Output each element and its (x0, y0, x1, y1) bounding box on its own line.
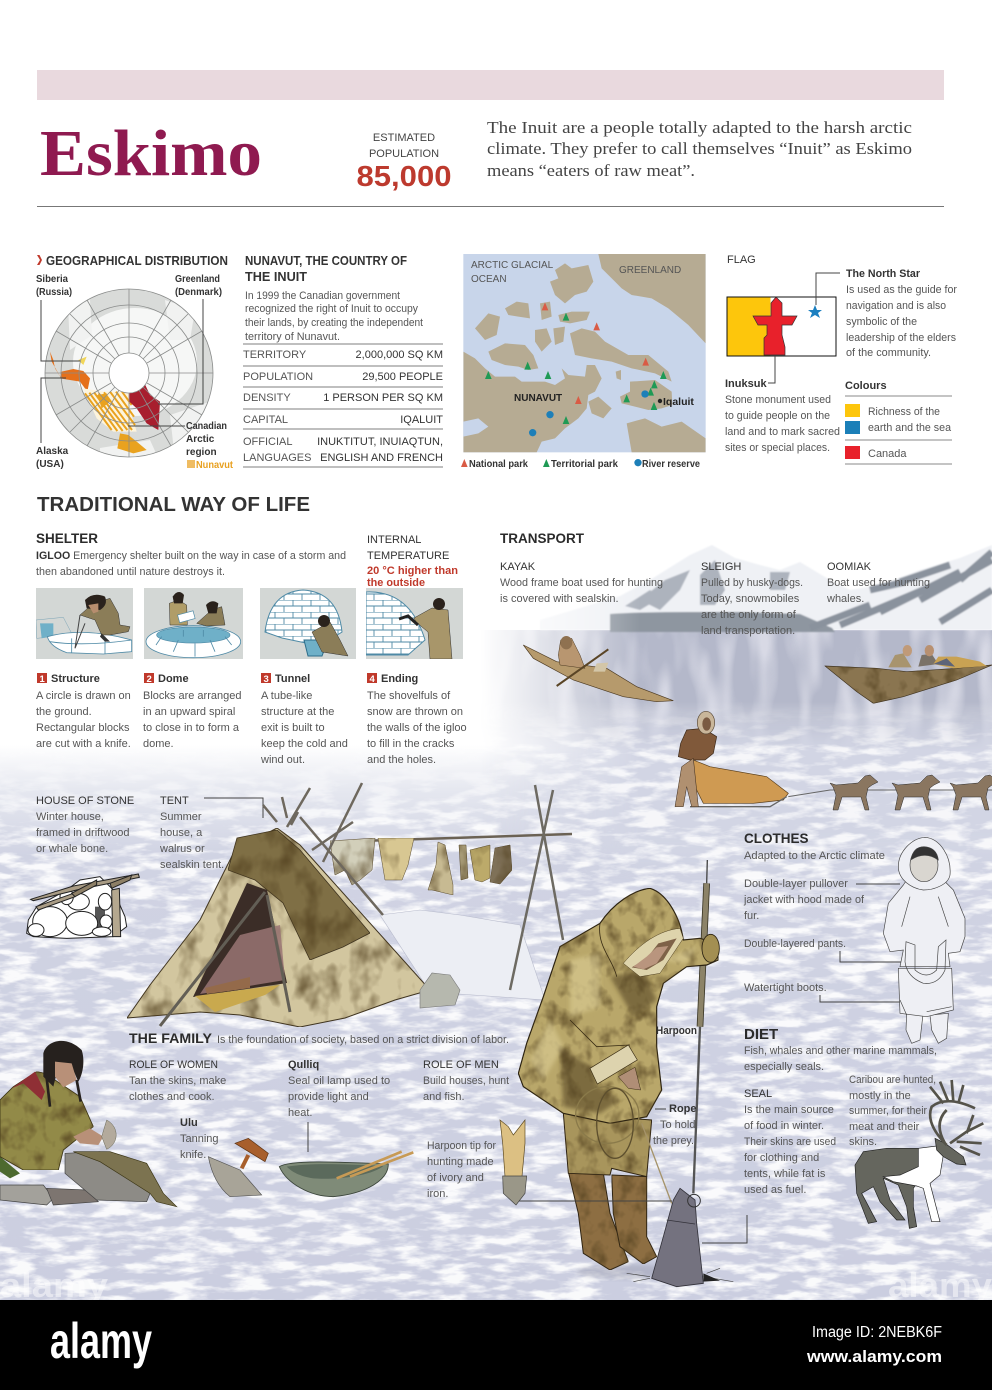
parka highlights (530, 947, 697, 1080)
igloo step 1 illustration (36, 588, 133, 659)
sleigh and driver (675, 711, 992, 807)
tent body (127, 828, 430, 1027)
parka (518, 888, 718, 1123)
harpoon and rope labels: Rope (669, 1103, 696, 1115)
estimated population: ESTIMATED (373, 132, 435, 144)
map legend: River reserve (642, 459, 700, 470)
seal (627, 1188, 733, 1287)
kayak (523, 636, 673, 702)
diet text: of food in winter. (744, 1120, 824, 1132)
harpoon and rope labels: Harpoon (656, 1025, 697, 1037)
igloo step 3 illustration (260, 588, 356, 659)
watermarks: alamy (888, 1267, 992, 1305)
hood fur and face (623, 928, 683, 977)
park markers (461, 302, 649, 467)
shelter intro: SHELTER (36, 531, 98, 546)
estimated population: 85,000 (356, 161, 452, 193)
panel: flag (725, 254, 957, 464)
panel: Nunavut facts: INUKTITUT, INUIAQTUN, (317, 436, 443, 448)
region labels: (USA) (36, 459, 64, 470)
section heading: TRADITIONAL WAY OF LIFE (37, 494, 310, 516)
diet text: Fish, whales and other marine mammals, (744, 1045, 937, 1057)
igloo step captions: wind out. (260, 754, 305, 766)
panel: Nunavut facts: 1 PERSON PER SQ KM (323, 392, 443, 404)
estimated population (356, 132, 452, 193)
panel: Nunavut facts: territory of Nunavut. (245, 331, 340, 343)
black footer with alamy credit: alamy (50, 1313, 152, 1369)
colours legend: earth and the sea (868, 422, 952, 434)
map legend: National park (469, 459, 528, 470)
clothes text: CLOTHES (744, 831, 809, 846)
panel: Nunavut facts: LANGUAGES (243, 452, 311, 464)
clothes text: Double-layered pants. (744, 938, 846, 950)
transport text: OOMIAK (827, 561, 872, 573)
colours legend: Richness of the (868, 406, 940, 418)
igloo step captions: are cut with a knife. (36, 738, 131, 750)
igloo step captions: snow are thrown on (367, 706, 463, 718)
black footer with alamy credit (0, 1300, 992, 1390)
transport text: Today, snowmobiles (701, 593, 800, 605)
polar map (45, 289, 215, 462)
north star text: leadership of the elders (846, 332, 956, 344)
tent label: house, a (160, 827, 203, 839)
the family intro: iron. (427, 1188, 448, 1200)
panel: Nunavut facts: CAPITAL (243, 414, 288, 426)
colours legend (845, 380, 952, 464)
diet text: tents, while fat is (744, 1168, 826, 1180)
shelter intro: then abandoned until nature destroys it. (36, 566, 225, 578)
intro text: means “eaters of raw meat”. (487, 161, 695, 180)
tent label (159, 795, 263, 871)
panel: flag: FLAG (727, 254, 756, 266)
map labels: Iqaluit (663, 396, 694, 408)
Nunavut flag (727, 297, 836, 356)
panel: Nunavut facts: THE INUIT (245, 269, 307, 284)
internal temperature: the outside (367, 577, 425, 589)
arctic landscape: mountains and frozen lake (498, 546, 992, 828)
diet text: especially seals. (744, 1061, 824, 1073)
north star text: The North Star (846, 268, 921, 280)
house of stone text: Winter house, (36, 811, 104, 823)
heading: geographical distribution: GEOGRAPHICAL DISTRIBUTION (46, 253, 228, 268)
transport text: KAYAK (500, 561, 536, 573)
the family intro: Is the foundation of society, based on a strict division of labor. (217, 1034, 509, 1046)
map labels: NUNAVUT (514, 393, 562, 404)
harpoon and rope labels: the prey. (653, 1135, 694, 1147)
the family intro: knife. (180, 1149, 206, 1161)
snowy ground background (0, 745, 992, 1300)
oomiak boat (825, 645, 992, 703)
snow drift behind tent (380, 910, 545, 1000)
transport text: SLEIGH (701, 561, 741, 573)
shelter intro (36, 531, 346, 578)
transport text (500, 531, 930, 637)
igloo step captions: 4 (370, 674, 376, 685)
clothes text: Watertight boots. (744, 982, 827, 994)
igloo step captions: the ground. (36, 706, 92, 718)
icon: house of stone (27, 874, 139, 938)
black footer with alamy credit: www.alamy.com (806, 1347, 942, 1366)
tent door (193, 883, 287, 997)
igloo step captions: Dome (158, 673, 189, 685)
igloo step 4 illustration (366, 588, 463, 659)
north star text: Is used as the guide for (846, 284, 957, 296)
inuksuk text: sites or special places. (725, 442, 830, 454)
igloo step captions: to close in to form a (143, 722, 240, 734)
intro text (487, 118, 912, 180)
north star text: of the community. (846, 347, 931, 359)
colours legend: Colours (845, 380, 887, 392)
diet text: Their skins are used (744, 1136, 836, 1148)
top pink banner (37, 70, 944, 100)
ground shadow (577, 1264, 677, 1279)
transport text: whales. (826, 593, 864, 605)
panel: geographical distribution (36, 253, 234, 471)
inuksuk text (725, 378, 840, 454)
inuksuk text: Inuksuk (725, 378, 767, 390)
inuksuk text: Stone monument used (725, 394, 831, 406)
clothes text (743, 831, 923, 1002)
the family intro: clothes and cook. (129, 1091, 215, 1103)
region labels: Arctic (186, 434, 215, 445)
transport text: Boat used for hunting (827, 577, 930, 589)
summer tent (127, 783, 430, 1027)
clothes text: Adapted to the Arctic climate (744, 850, 885, 862)
panel: Nunavut facts: 29,500 PEOPLE (362, 371, 443, 383)
clothes text: Double-layer pullover (744, 878, 848, 890)
igloo step captions: 1 (40, 674, 46, 685)
igloo step captions: 2 (146, 674, 152, 685)
igloo step captions: and the holes. (367, 754, 436, 766)
fur cuff and hand (590, 1045, 637, 1084)
tent poles (263, 783, 383, 915)
boots (568, 1172, 628, 1270)
internal temperature: TEMPERATURE (367, 550, 449, 562)
inuksuk text: to guide people on the (725, 410, 830, 422)
igloo step captions: 3 (264, 674, 269, 685)
clothes text: jacket with hood made of (743, 894, 865, 906)
diet text: meat and their (849, 1121, 920, 1133)
igloo step captions: Rectangular blocks (36, 722, 130, 734)
rocks by tent (420, 973, 460, 1008)
diet text: Is the main source (744, 1104, 834, 1116)
intro text: climate. They prefer to call themselves “Inuit” as Eskimo (487, 139, 912, 158)
panel: Nunavut facts: DENSITY (243, 392, 291, 404)
the family intro: THE FAMILY (129, 1030, 213, 1046)
igloo step 2 illustration (144, 588, 243, 659)
igloo step captions: exit is built to (261, 722, 325, 734)
diet text: SEAL (744, 1088, 772, 1100)
the family intro: Harpoon tip for (427, 1140, 496, 1152)
estimated population: POPULATION (369, 148, 439, 160)
the family intro: heat. (288, 1107, 312, 1119)
region labels: region (186, 447, 217, 458)
house of stone text: or whale bone. (36, 843, 108, 855)
region labels (36, 274, 234, 471)
shelter intro: IGLOO Emergency shelter built on the way in case of a storm and (36, 550, 346, 562)
panel: Nunavut facts: NUNAVUT, THE COUNTRY OF (245, 253, 407, 268)
intro text: The Inuit are a people totally adapted to the harsh arctic (487, 118, 912, 137)
map labels: ARCTIC GLACIAL (471, 260, 554, 271)
internal temperature (367, 534, 458, 589)
the family intro (129, 1030, 509, 1200)
the family intro: Seal oil lamp used to (288, 1075, 390, 1087)
drying rack with skins (330, 785, 572, 990)
region labels: (Denmark) (175, 287, 222, 298)
igloo step captions: to fill in the cracks (367, 738, 455, 750)
watermarks: alamy (0, 1267, 108, 1305)
harpoon tip (500, 1120, 527, 1205)
map labels: OCEAN (471, 274, 507, 285)
house of stone text: HOUSE OF STONE (36, 795, 134, 807)
the family intro: provide light and (288, 1091, 369, 1103)
map legend (469, 459, 700, 470)
igloo step captions: A circle is drawn on (36, 690, 131, 702)
house of stone text: framed in driftwood (36, 827, 130, 839)
diet text: DIET (744, 1026, 778, 1043)
door poles (160, 892, 290, 1026)
tent label: walrus or (159, 843, 205, 855)
clothes text: fur. (744, 910, 759, 922)
harpoon shaft (705, 860, 709, 883)
internal temperature: INTERNAL (367, 534, 421, 546)
watermarks (0, 1267, 992, 1305)
the family intro: of ivory and (427, 1172, 484, 1184)
tent label: TENT (160, 795, 189, 807)
parka shading (560, 970, 657, 1113)
transport text: land transportation. (701, 625, 795, 637)
panel: Nunavut facts (243, 253, 443, 467)
the family intro: Ulu (180, 1117, 198, 1129)
igloo step captions: Structure (51, 673, 100, 685)
the family intro: Qulliq (288, 1059, 319, 1071)
igloo step captions: the walls of the igloo (367, 722, 467, 734)
the family intro: Build houses, hunt (423, 1075, 509, 1087)
sleeve outline (570, 923, 630, 1047)
inuksuk text: land and to mark sacred (725, 426, 840, 438)
region labels: Nunavut (196, 460, 234, 471)
north star text: symbolic of the (846, 316, 917, 328)
transport text: Pulled by husky-dogs. (701, 577, 803, 589)
transport text: are the only form of (701, 609, 797, 621)
the family intro: Tanning (180, 1133, 219, 1145)
igloo step captions: Tunnel (275, 673, 310, 685)
panel: Nunavut facts: ENGLISH AND FRENCH (320, 452, 443, 464)
diet text: skins. (849, 1136, 877, 1148)
the family intro: hunting made (427, 1156, 494, 1168)
diet text: summer, for their (849, 1105, 927, 1117)
trousers (563, 1113, 652, 1177)
igloo step captions: The shovelfuls of (367, 690, 451, 702)
panel: Nunavut map (461, 254, 706, 470)
the family intro: ROLE OF MEN (423, 1059, 499, 1071)
igloo step captions: Blocks are arranged (143, 690, 241, 702)
diet text (744, 1026, 937, 1196)
black footer with alamy credit: Image ID: 2NEBK6F (812, 1324, 942, 1341)
husky dogs (830, 775, 992, 810)
igloo step captions: in an upward spiral (143, 706, 235, 718)
the family intro: ROLE OF WOMEN (129, 1059, 218, 1071)
diet text: mostly in the (849, 1090, 911, 1102)
igloo step captions: dome. (143, 738, 174, 750)
Inuit hunter with harpoon (518, 860, 719, 1279)
panel: Nunavut facts: recognized the right of Inuit to occupy (245, 303, 418, 315)
igloo step captions (36, 673, 467, 766)
region labels: Canadian (186, 421, 227, 432)
panel: Nunavut facts: In 1999 the Canadian government (245, 290, 400, 302)
north star text (846, 268, 957, 359)
upper dark hide (228, 830, 370, 960)
panel: Nunavut facts: OFFICIAL (243, 436, 293, 448)
house of stone text (36, 795, 134, 855)
caribou (855, 1080, 983, 1228)
diet text: used as fuel. (744, 1184, 806, 1196)
the family intro: Tan the skins, make (129, 1075, 226, 1087)
panel: Nunavut facts: their lands, by creating the independent (245, 317, 423, 329)
coiled rope (576, 1087, 639, 1143)
qulliq lamp (279, 1152, 413, 1197)
region labels: Alaska (36, 446, 69, 457)
igloo step captions: keep the cold and (261, 738, 348, 750)
map labels: GREENLAND (619, 265, 681, 276)
panel: Nunavut facts: TERRITORY (243, 349, 307, 361)
panel: Nunavut facts: 2,000,000 SQ KM (356, 349, 443, 361)
region labels: (Russia) (36, 287, 72, 298)
title: Eskimo (40, 117, 262, 190)
diet text: for clothing and (744, 1152, 819, 1164)
panel: Nunavut facts: IQALUIT (400, 414, 443, 426)
igloo step captions: Ending (381, 673, 418, 685)
region labels: Siberia (36, 274, 68, 285)
north star text: navigation and is also (846, 300, 946, 312)
tent label: sealskin tent. (160, 859, 224, 871)
hanging skins (330, 838, 512, 895)
parka figure line drawing (883, 837, 965, 1043)
igloo step captions: A tube-like (261, 690, 312, 702)
map labels (471, 260, 694, 408)
harpoon and rope labels (518, 1025, 747, 1243)
map legend: Territorial park (551, 459, 618, 470)
harpoon and rope labels: To hold (660, 1119, 695, 1131)
tent label: Summer (160, 811, 202, 823)
region labels: Greenland (175, 274, 220, 285)
the family intro: and fish. (423, 1091, 465, 1103)
diet text: Caribou are hunted, (849, 1074, 936, 1086)
igloo step captions: structure at the (261, 706, 334, 718)
transport text: is covered with sealskin. (500, 593, 619, 605)
internal temperature: 20 °C higher than (367, 565, 458, 577)
transport text: TRANSPORT (500, 531, 585, 546)
ulu knife (208, 1138, 268, 1197)
transport text: Wood frame boat used for hunting (500, 577, 663, 589)
panel: Nunavut facts: POPULATION (243, 371, 313, 383)
woman tanning skins (0, 1041, 177, 1207)
colours legend: Canada (868, 448, 907, 460)
